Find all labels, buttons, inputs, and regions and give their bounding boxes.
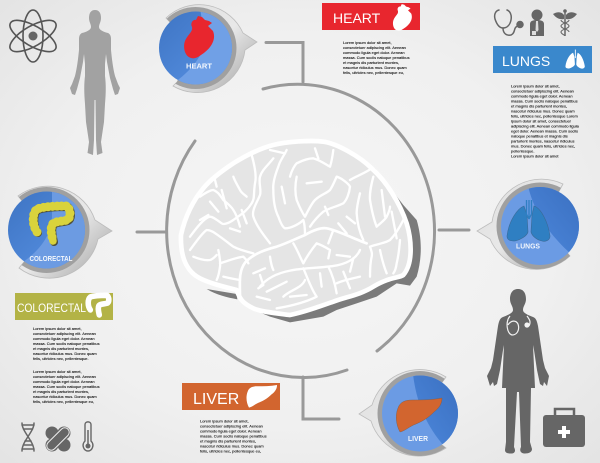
icon: lungs white <box>565 50 585 69</box>
text block: colorectal second: consectetuer adipiscing elit. Aenean <box>33 374 96 379</box>
heading: colorectal <box>15 293 113 320</box>
text block: colorectal first: consectetuer adipiscing elit. Aenean <box>33 331 96 336</box>
text block: heart: nascetur ridiculus mus. Donec quam <box>343 65 407 70</box>
text block: colorectal first: massa. Cum sociis natoque penatibus <box>33 341 100 346</box>
silver ring <box>477 179 570 269</box>
ring inner band <box>167 7 236 89</box>
ring inner band <box>496 182 570 270</box>
heading: lungs <box>493 46 592 73</box>
text block: colorectal second: massa. Cum sociis natoque penatibus <box>33 384 100 389</box>
brain illustration <box>181 141 421 322</box>
bubble: heart <box>154 5 257 93</box>
icon: lungs <box>507 200 550 241</box>
text block: lungs: eget dolor. Aenean massa. Cum sociis <box>511 128 578 134</box>
text block: lungs: massa. Cum sociis natoque penatibus <box>511 98 578 104</box>
text block: heart: felis, ultricies nec, pellentesque eu, <box>343 70 404 75</box>
heading: liver <box>182 383 280 410</box>
heading: lungs: LUNGS <box>502 53 550 69</box>
icon: liver white <box>247 385 277 408</box>
text block: lungs: ipsum dolor sit amet, consectetuer <box>511 118 572 124</box>
heading: heart <box>322 3 420 31</box>
text block: lungs: nascetur ridiculus mus. Donec quam <box>511 108 575 114</box>
text block: liver: Lorem ipsum dolor sit amet, <box>200 418 249 424</box>
text block: lungs: pellentesque. <box>511 148 534 154</box>
blue disc <box>8 192 85 268</box>
text block: heart: consectetuer adipiscing elit. Aenean <box>343 45 406 50</box>
icon: heart white <box>393 4 412 31</box>
text block: colorectal second: felis, ultricies nec, pellentesque eu, <box>33 399 94 404</box>
text block: lungs: commodo ligula eget dolor. Aenean <box>511 94 573 98</box>
text block: liver: commodo ligula eget dolor. Aenean <box>200 428 262 434</box>
text block: lungs: parturient montes, nascetur ridiculus <box>511 138 574 144</box>
text block: heart: et magnis dis parturient montes, <box>343 60 399 65</box>
icon: colon <box>33 206 71 242</box>
bubble: liver <box>359 370 462 456</box>
heading: heart: HEART <box>333 10 381 26</box>
bubble label: LUNGS <box>516 244 540 250</box>
text block: liver: massa. Cum sociis natoque penatibus <box>200 434 267 438</box>
text block: colorectal second: et magnis dis parturient montes, <box>33 389 89 394</box>
text block: lungs: natoque penatibus et magnis dis <box>511 134 568 138</box>
text block: colorectal second: commodo ligula eget dolor. Aenean <box>33 379 95 384</box>
text block: lungs: felis, ultricies nec, pellentesque Lorem <box>511 114 578 118</box>
text block: lungs: consectetuer adipiscing elit. Aenean <box>511 88 574 94</box>
text block: heart: massa. Cum sociis natoque penatibus <box>343 55 410 60</box>
icon: doctor figure <box>487 289 549 454</box>
silver ring <box>166 5 257 93</box>
text block: colorectal first: felis, ultricies nec, pellentesque. <box>33 356 89 361</box>
blue disc <box>500 186 582 266</box>
text block: lungs: et magnis dis parturient montes, <box>511 104 567 108</box>
text block: heart: Lorem ipsum dolor sit amet, <box>343 40 392 45</box>
icon: human body silhouette <box>70 10 120 155</box>
text block: liver: consectetuer adipiscing elit. Aenean <box>200 424 263 428</box>
blue disc <box>159 12 232 84</box>
text block: liver: et magnis dis parturient montes, <box>200 438 256 444</box>
icon: stethoscope <box>495 10 523 35</box>
central circle outline and connectors <box>137 42 469 419</box>
text block: liver: felis, ultricies nec, pellentesque eu, <box>200 448 261 454</box>
icon: atom <box>5 10 61 62</box>
icon: DNA <box>22 423 34 451</box>
text block: lungs: Lorem ipsum dolor sit amet <box>511 154 559 158</box>
icon: doctor bust <box>530 10 544 36</box>
text block: colorectal second: nascetur ridiculus mus. Donec quam <box>33 394 97 399</box>
heading: liver: LIVER <box>193 391 239 408</box>
bubble: lungs <box>477 179 584 270</box>
icon: heart <box>184 16 214 58</box>
ring inner band <box>378 371 446 456</box>
icon: colon white <box>88 295 109 315</box>
bubble label: COLORECTAL <box>30 256 73 263</box>
silver ring <box>359 370 446 456</box>
text block: colorectal first: commodo ligula eget dolor. Aenean <box>33 336 95 341</box>
icon: bandage <box>45 426 71 452</box>
text block: liver: nascetur ridiculus mus. Donec quam <box>200 444 264 448</box>
text block: colorectal first: Lorem ipsum dolor sit amet, <box>33 326 82 331</box>
blue disc <box>380 374 460 454</box>
bubble label: LIVER <box>408 436 428 443</box>
text block: colorectal first: nascetur ridiculus mus. Donec quam <box>33 351 97 356</box>
bubble: colorectal <box>4 186 112 278</box>
icon: caduceus <box>553 9 577 36</box>
text block: colorectal first: et magnis dis parturient montes, <box>33 346 89 351</box>
heading: colorectal: COLORECTAL <box>17 303 87 315</box>
text block: colorectal second: Lorem ipsum dolor sit amet, <box>33 369 82 374</box>
ring inner band <box>19 187 90 273</box>
icon: liver <box>396 398 442 432</box>
brain shadow <box>207 168 421 322</box>
text block: lungs: adipiscing elit. Aenean commodo ligula <box>511 124 580 128</box>
text block: lungs: Lorem ipsum dolor sit amet, <box>511 84 560 88</box>
silver ring <box>18 186 112 278</box>
text block: lungs: mus. Donec quam felis, ultricies nec, <box>511 144 575 148</box>
icon: thermometer <box>83 422 93 451</box>
icon: first aid kit <box>543 409 585 447</box>
bubble label: HEART <box>186 62 212 70</box>
text block: heart: commodo ligula eget dolor. Aenean <box>343 50 405 55</box>
stethoscope on doctor <box>507 316 530 335</box>
